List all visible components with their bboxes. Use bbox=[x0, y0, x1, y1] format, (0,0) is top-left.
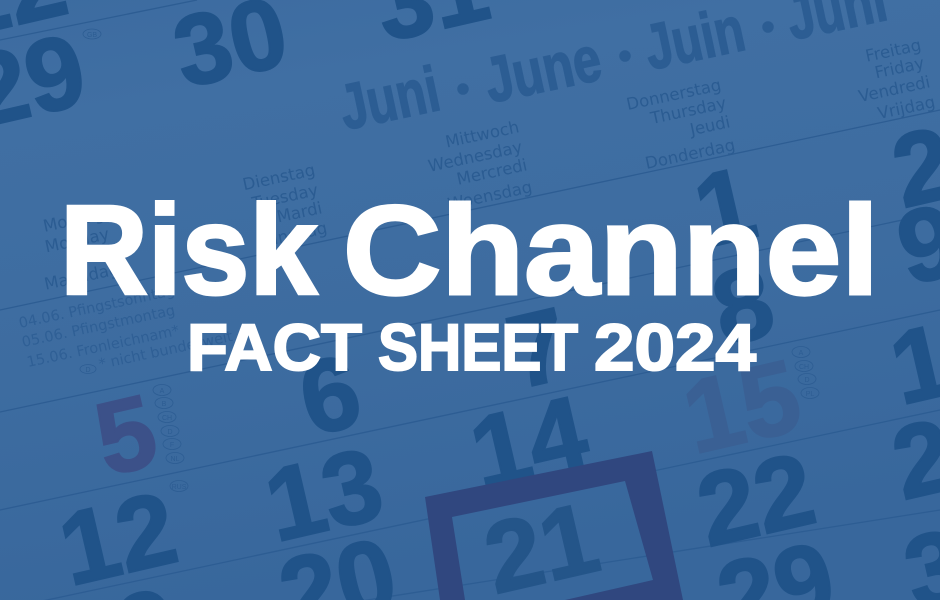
calendar weekday labels: Wednesday bbox=[426, 137, 524, 176]
title bbox=[60, 179, 879, 321]
calendar weekday labels: Montag bbox=[41, 204, 106, 236]
calendar weekday labels: Vrijdag bbox=[876, 92, 937, 123]
country badges bbox=[80, 29, 819, 492]
calendar day numbers: 7 bbox=[497, 285, 579, 410]
calendar weekday labels: Dienstag bbox=[241, 160, 317, 194]
calendar weekday labels: Thursday bbox=[648, 93, 728, 128]
subtitle bbox=[187, 310, 756, 384]
subtitle: FACT bbox=[187, 310, 362, 384]
calendar weekday labels: Donderdag bbox=[643, 135, 737, 173]
country badges: F bbox=[170, 442, 174, 449]
calendar weekday labels: Monday bbox=[43, 224, 111, 256]
country badges: A bbox=[160, 388, 165, 395]
calendar highlighted day 15: 15 bbox=[673, 338, 811, 475]
calendar weekday labels bbox=[41, 35, 937, 294]
country badges: PL bbox=[806, 391, 814, 398]
country badges: NL bbox=[171, 456, 180, 463]
calendar date marker frame bbox=[425, 451, 683, 600]
calendar day numbers: 22 bbox=[687, 431, 825, 568]
holiday notes bbox=[18, 283, 234, 373]
calendar weekday labels: Maandag bbox=[43, 259, 121, 294]
country badges: CH bbox=[799, 364, 809, 371]
calendar day numbers: 14 bbox=[460, 374, 598, 511]
calendar weekday labels: Friday bbox=[873, 53, 926, 82]
calendar weekday labels: Donnerstag bbox=[625, 75, 723, 114]
country badges: D bbox=[804, 377, 810, 384]
country badges: B bbox=[162, 401, 167, 408]
title: Risk bbox=[60, 179, 317, 321]
calendar day numbers: 6 bbox=[289, 332, 371, 457]
subtitle: SHEET bbox=[378, 310, 578, 384]
holiday notes: 15.06. Fronleichnam* bbox=[26, 323, 181, 371]
calendar weekday labels: Woensdag bbox=[446, 177, 534, 214]
calendar month heading: June bbox=[478, 22, 607, 117]
calendar day numbers: 13 bbox=[255, 426, 393, 563]
country badges: A bbox=[799, 350, 804, 357]
title: Channel bbox=[343, 179, 879, 321]
country badges: CH bbox=[162, 415, 172, 422]
calendar weekday labels: Tuesday bbox=[249, 180, 320, 213]
calendar highlighted day 5: 5 bbox=[85, 372, 167, 497]
calendar weekday labels: Mittwoch bbox=[444, 117, 521, 151]
calendar weekday labels: Dinsdag bbox=[259, 218, 329, 251]
calendar weekday labels: Vendredi bbox=[857, 72, 932, 106]
country badges: GB bbox=[87, 32, 97, 39]
country badges: D bbox=[167, 429, 173, 436]
holiday notes: 05.06. Pfingstmontag bbox=[21, 303, 177, 351]
calendar weekday labels: Mercredi bbox=[455, 155, 529, 189]
calendar day numbers: 8 bbox=[702, 242, 784, 367]
calendar weekday labels: Jeudi bbox=[687, 112, 732, 140]
calendar weekday labels: Freitag bbox=[864, 35, 923, 66]
calendar month heading bbox=[333, 0, 893, 144]
calendar month heading: Juni bbox=[333, 52, 446, 144]
country badges: D bbox=[85, 367, 91, 374]
holiday notes: 04.06. Pfingstsonntag bbox=[18, 283, 176, 332]
holiday notes: * nicht bundesweit bbox=[98, 329, 234, 373]
calendar day numbers: 1 bbox=[684, 144, 766, 269]
subtitle: 2024 bbox=[594, 310, 756, 384]
calendar weekday labels: Mardi bbox=[275, 198, 324, 226]
country badges: RUS bbox=[172, 484, 187, 491]
